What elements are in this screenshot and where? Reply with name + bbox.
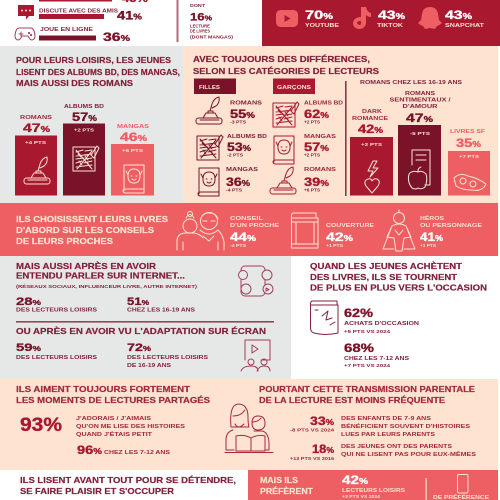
panel: coral preferences [248, 470, 498, 500]
panel: social networks [262, 0, 500, 46]
heading: conseils: D'ABORD SUR LES CONSEILS [16, 225, 154, 235]
heading: internet: ENTENDU PARLER SUR INTERNET... [16, 270, 185, 280]
icon: snapchat [418, 7, 442, 29]
bar: albums bd [63, 104, 105, 196]
garcons: mangas: +2 PTS [304, 152, 320, 158]
panel: white occasion [291, 256, 500, 379]
bar: dark romance: +2 PTS [361, 142, 382, 147]
stat: 42%: LECTEURS LOISIRS [342, 488, 405, 494]
panel: coral choix des livres [0, 203, 498, 256]
heading: transmission: POURTANT CETTE TRANSMISSION PARENTALE [259, 384, 475, 394]
stat: lecture de livres: LECTURE [190, 24, 210, 28]
divider line [345, 81, 347, 196]
heading: preferent: PRÉFÈRENT [260, 485, 314, 496]
stat: tiktok: 43 % [378, 8, 405, 22]
stat: snapchat [445, 8, 485, 29]
stat: conseil proche: CONSEIL [230, 216, 264, 222]
panel: peach differences [183, 46, 498, 203]
stat: lecture de livres: (DONT MANGAS) [190, 34, 234, 40]
heading: detente: SE FAIRE PLAISIR ET S'OCCUPER [20, 486, 174, 496]
filles: mangas: 36 % [226, 175, 250, 189]
bar: mangas: MANGAS [117, 124, 149, 130]
stat: snapchat: SNAPCHAT [445, 23, 485, 29]
activity: joue en ligne: 36 % [103, 30, 130, 44]
bar: romans sentimentaux: ROMANS [405, 91, 435, 97]
text: enfants 7-9 ans: LUES PAR LEURS PARENTS [341, 432, 435, 438]
heading: occasion [310, 260, 487, 292]
icon: screen audience [241, 340, 270, 371]
heading: detente [20, 474, 236, 496]
heading: conseils: ILS CHOISISSENT LEURS LIVRES [16, 214, 168, 224]
text: parents: QUI NE LISENT PAS POUR EUX-MÊMES [341, 450, 476, 458]
garcons: romans: +6 PTS [304, 188, 320, 192]
stat: 59%: DES LECTEURS LOISIRS [16, 355, 97, 361]
stat: tiktok: TIKTOK [377, 23, 403, 29]
garcons: romans: ROMANS [304, 167, 336, 173]
heading: moments partages: ILS AIMENT TOUJOURS FORTEMENT [16, 384, 191, 394]
garcons: romans: 39 % [304, 175, 329, 189]
stat: snapchat: 43 % [445, 8, 472, 22]
filles: albums bd [197, 134, 267, 160]
stat: 18% [290, 442, 335, 461]
bar: livres sf: LIVRES SF [450, 129, 486, 135]
stat: conseil proche: -4 PTS [230, 243, 246, 248]
icon: hero [383, 210, 415, 251]
stat: lecture de livres: DE LIVRES [190, 28, 210, 34]
stat: 42%: 42 % [342, 473, 368, 487]
heading: transmission: DE LA LECTURE EST MOINS FRÉQUENTE [259, 394, 445, 405]
heading: differences: AVEC TOUJOURS DES DIFFÉRENCES, [193, 53, 370, 64]
stat: 68%: 68% [344, 341, 374, 355]
panel: grey internet et adaptation [0, 256, 291, 379]
bar: previous activity [39, 0, 148, 5]
stat: 72%: DES LECTEURS LOISIRS [127, 355, 208, 361]
divider line [176, 0, 178, 42]
heading: types de lecture: LISENT DES ALBUMS BD, DES MANGAS, [16, 67, 180, 77]
chart heading: romans 16-19: ROMANS CHEZ LES 16-19 ANS [360, 80, 462, 86]
bar: dark romance: DARK [362, 109, 382, 115]
text: j'adorais: J'ADORAIS / J'AIMAIS [76, 416, 151, 422]
icon: book cover [291, 213, 318, 248]
garcons: romans [270, 167, 336, 194]
heading: types de lecture: MAIS AUSSI DES ROMANS [16, 78, 133, 88]
stat: youtube: 70 % [305, 8, 333, 22]
stat: 42% [342, 473, 405, 499]
filles: romans: 55 % [230, 107, 255, 121]
stat: 33%: 33 % [310, 414, 334, 428]
stat: 62% [344, 306, 419, 334]
stat: couverture [326, 223, 374, 248]
bar: romans: 47 % [23, 121, 50, 135]
bar: romans sentimentaux: SENTIMENTAUX / [390, 98, 451, 104]
text: parents [341, 444, 476, 458]
text: enfants 7-9 ans: BÉNÉFICIENT SOUVENT D'HISTOIRES [341, 422, 470, 430]
stat: 18%: 18% [312, 442, 334, 456]
bar: romans [15, 115, 57, 196]
stat: couverture: COUVERTURE [326, 223, 374, 229]
stat: youtube [305, 8, 339, 29]
heading: preferent: MAIS ILS [260, 475, 298, 485]
bar: dark romance: 42 % [358, 122, 383, 136]
stat: tiktok [377, 8, 405, 29]
heading: internet: MAIS AUSSI APRÈS EN AVOIR [16, 260, 156, 271]
text: j'adorais: QU'ON ME LISE DES HISTOIRES [76, 424, 185, 430]
stat: lecture de livres: DONT [190, 3, 206, 8]
stat: 96%: 96 % [77, 443, 102, 457]
bar: albums bd: +2 PTS [74, 128, 94, 132]
bar: albums bd: ALBUMS BD [64, 104, 104, 110]
filles: mangas: -4 PTS [226, 188, 242, 192]
bar: romans sentimentaux [390, 91, 451, 196]
icon: parent and child reading [225, 404, 273, 452]
filles: romans: ROMANS [230, 100, 262, 106]
filles: albums bd: ALBUMS BD [227, 134, 267, 140]
bar: livres sf: +7 PTS [459, 154, 479, 159]
icon: two people [177, 212, 224, 250]
activity: discute avec des amis: 41 % [117, 8, 142, 22]
bar: romans: +4 PTS [25, 140, 46, 145]
heading: conseils [16, 214, 168, 246]
stat: 72%: 72 % [127, 342, 152, 354]
garcons: albums bd: ALBUMS BD [304, 100, 343, 106]
stat: heros: HÉROS [420, 214, 444, 222]
stat: 62%: +5 PTS VS 2024 [344, 329, 391, 334]
heading: moments partages: LES MOMENTS DE LECTURES PARTAGÉS [16, 394, 210, 405]
filles: albums bd: 53 % [227, 140, 251, 154]
stat: 62%: ACHATS D'OCCASION [344, 321, 419, 327]
filles: romans: -3 PTS [230, 120, 246, 124]
bar: mangas: 46 % [120, 130, 147, 144]
heading: internet [16, 260, 198, 289]
icon: chat bubble [18, 5, 34, 20]
bar: romans sentimentaux: D'AMOUR [402, 104, 438, 110]
garcons: mangas: MANGAS [304, 134, 336, 140]
heading: moments partages [16, 384, 210, 405]
filles: albums bd: -2 PTS [227, 152, 243, 158]
stat: couverture: +1 PTS [326, 243, 343, 248]
stat: lecture de livres [190, 3, 234, 40]
stat: 68% [344, 341, 409, 368]
garcons: albums bd: +2 PTS [304, 120, 320, 124]
text: enfants 7-9 ans: DES ENFANTS DE 7-9 ANS [341, 416, 431, 422]
stat: couverture: 42 % [326, 230, 353, 244]
stat: conseil proche: D'UN PROCHE [230, 223, 279, 229]
heading: adaptation: OU APRÈS EN AVOIR VU L'ADAPTATION SUR ÉCRAN [16, 325, 266, 336]
heading: conseils: DE LEURS PROCHES [16, 236, 113, 246]
bar: livres sf: 35 % [456, 136, 481, 150]
stat: 33% [290, 414, 335, 432]
stat: heros [420, 214, 482, 248]
heading: preferent [260, 475, 314, 496]
heading: occasion: QUAND LES JEUNES ACHÈTENT [310, 260, 463, 271]
heading: differences: SELON LES CATÉGORIES DE LECTEURS [193, 65, 379, 76]
tab: garcons: GARÇONS [277, 85, 311, 91]
stat: conseil proche: 44 % [230, 230, 256, 244]
stat: 59% [16, 342, 97, 361]
icon: youtube [276, 10, 298, 27]
garcons: mangas [273, 134, 336, 164]
icon: used book [310, 301, 338, 334]
stat: 28% [16, 296, 97, 314]
divider line [16, 321, 274, 323]
panel: top left activities [0, 0, 262, 46]
stat: 33%: -8 PTS VS 2024 [290, 428, 335, 432]
text: j'adorais: QUAND J'ÉTAIS PETIT [76, 430, 153, 438]
stat: 51% [127, 296, 195, 314]
heading: detente: ILS LISENT AVANT TOUT POUR SE DÉTENDRE, [20, 474, 236, 485]
text: parents: DES JEUNES ONT DES PARENTS [341, 444, 452, 450]
garcons: albums bd [273, 100, 343, 127]
heading: types de lecture [16, 55, 180, 88]
bar: dark romance: ROMANCE [352, 116, 388, 122]
stat: heros: OU PERSONNAGE [420, 223, 482, 229]
icon: social networks [238, 266, 273, 296]
heading: transmission [259, 384, 475, 405]
stat: heros: +1 PTS [420, 243, 436, 248]
activity: joue en ligne [39, 27, 130, 44]
stat: 72% [127, 342, 208, 369]
activity: joue en ligne: JOUE EN LIGNE [40, 27, 93, 33]
heading: occasion: DE PLUS EN PLUS VERS L'OCCASION [310, 282, 487, 292]
bar: romans: ROMANS [20, 115, 52, 121]
heading: types de lecture: POUR LEURS LOISIRS, LES JEUNES [16, 55, 171, 65]
icon: game controller [15, 28, 35, 40]
stat: 51%: 51 % [127, 296, 150, 308]
stat: 96%: CHEZ LES 7-12 ANS [104, 450, 170, 456]
text: enfants 7-9 ans [341, 416, 470, 438]
stat: 93%: 93% [20, 415, 62, 436]
stat: 28%: 28 % [16, 296, 42, 308]
stat: heros: 41% [420, 230, 443, 244]
stat: 18%: +13 PTS VS 2016 [290, 456, 335, 461]
bar: romans sentimentaux: 47 % [406, 111, 433, 125]
stat: 72%: DE 16-19 ANS [127, 363, 171, 369]
divider line [426, 478, 427, 500]
tab: filles: FILLES [199, 85, 220, 91]
stat: 28%: DES LECTEURS LOISIRS [16, 308, 97, 314]
filles: mangas: MANGAS [226, 167, 258, 173]
text: j'adorais [76, 416, 185, 438]
tab: filles [194, 78, 236, 94]
garcons: mangas: 57 % [304, 140, 329, 154]
bar: mangas [111, 124, 154, 196]
stat: 42%: +3 PTS VS 2024 [342, 494, 381, 499]
stat: youtube: YOUTUBE [305, 23, 339, 29]
filles: romans [196, 97, 262, 124]
heading: internet: (RÉSEAUX SOCIAUX, INFLUENCEUR LIVRE, AUTRE INTERNET) [16, 284, 198, 289]
stat: lecture de livres: 16 % [190, 12, 213, 24]
bar: dark romance [350, 109, 393, 196]
tab: garcons [273, 78, 315, 94]
bar: livres sf [448, 129, 490, 196]
panel: white detente [0, 470, 248, 500]
stat: 62%: 62% [344, 306, 373, 320]
icon: phone [458, 474, 468, 493]
stat: conseil proche [230, 216, 279, 248]
icon: tiktok [353, 7, 371, 29]
garcons: albums bd: 62 % [304, 107, 329, 121]
activity: discute avec des amis [39, 8, 142, 22]
stat: 51%: CHEZ LES 16-19 ANS [127, 308, 195, 314]
bar: mangas: +6 PTS [122, 148, 143, 153]
stat: 96% [77, 443, 170, 457]
heading: differences [193, 53, 379, 76]
heading: occasion: DES LIVRES, ILS SE TOURNENT [310, 272, 458, 282]
stat: 68%: CHEZ LES 7-12 ANS [344, 356, 409, 362]
bar: albums bd: 57 % [72, 110, 97, 124]
stat: 68%: +7 PTS VS 2024 [344, 363, 391, 368]
filles: mangas [198, 167, 258, 196]
activity: discute avec des amis: DISCUTE AVEC DES AMIS [39, 8, 118, 14]
stat: 59%: 59 % [16, 342, 42, 354]
panel: peach lectures partagees [0, 379, 498, 470]
bar: romans sentimentaux: -5 PTS [410, 131, 430, 136]
panel: grey loisirs [0, 46, 183, 203]
